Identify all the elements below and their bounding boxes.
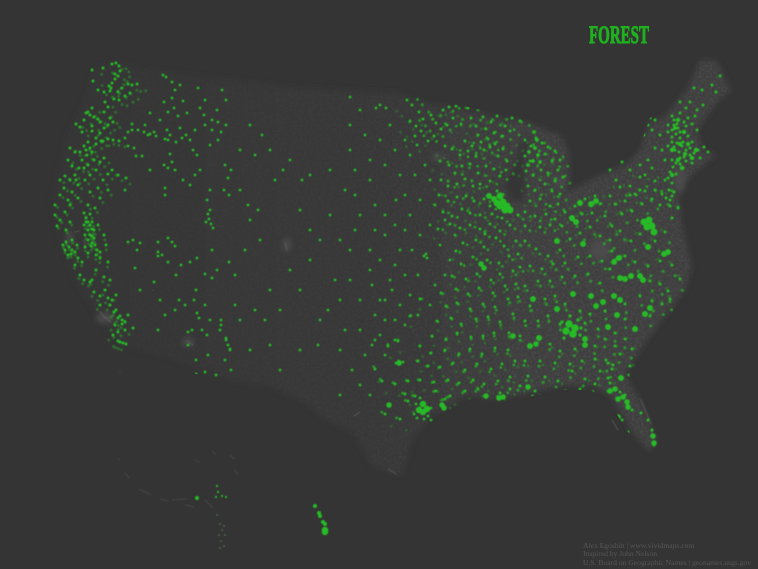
blobs: Appalachian and Carolina towns	[530, 201, 668, 378]
lakes: Michigan	[505, 132, 530, 203]
credit line 1: Alex Egoshin | www.vividmaps.com	[583, 541, 694, 550]
credit line 3: U.S. Board on Geographic Names | geonames.usgs.gov	[583, 558, 751, 567]
dots: Pacific Northwest	[55, 63, 137, 208]
dots: Florida	[604, 358, 656, 447]
dot: Anchorage	[195, 496, 199, 500]
blobs: Texas and Gulf towns	[389, 264, 536, 408]
dots: California	[55, 205, 133, 344]
dots: Hawaii	[315, 506, 325, 524]
dots: Michigan cluster	[528, 132, 540, 165]
dots: eastern field	[375, 100, 680, 419]
dots: Northern Rockies	[125, 75, 231, 228]
blob: Big Island	[322, 530, 328, 532]
blob: Houston spokes	[414, 398, 431, 420]
dots: Intermountain and Southwest	[128, 97, 386, 375]
dots: Michigan and Ohio Valley	[525, 138, 672, 227]
map: contiguous US land	[52, 60, 731, 476]
dots: Northeast	[600, 76, 720, 218]
map: settlement grain	[424, 62, 727, 442]
dots: Upper Midwest	[407, 100, 520, 231]
dots: Mississippi Valley	[375, 234, 520, 419]
blob: Maine and Boston clusters	[672, 120, 696, 175]
map: pale coast and city dots	[75, 231, 652, 474]
title: FOREST	[589, 22, 649, 49]
map: faint city lights	[67, 153, 685, 346]
blob: Chicago	[497, 196, 510, 210]
dots: Great Plains	[318, 125, 455, 395]
dots: western field, second scatter	[50, 66, 147, 350]
dots: Atlanta satellites	[562, 316, 581, 338]
map: Alaska grey coastline	[118, 443, 237, 508]
credit line 2: Inspired by John Nelson	[583, 549, 657, 558]
dots: Alaska	[216, 486, 226, 497]
blob: Houston	[419, 404, 427, 412]
dots: Alaska panhandle	[217, 515, 225, 548]
dots: Mid-Atlantic and Southeast	[520, 227, 680, 391]
blob: Chicago west	[489, 196, 494, 199]
blob: Washington DC area	[644, 220, 654, 232]
blob: Atlanta	[566, 324, 575, 334]
dots: eastern field, second scatter	[372, 98, 690, 430]
dots: eastern field, third scatter	[365, 97, 686, 432]
dots: western field	[55, 63, 137, 344]
map: forest place dots	[50, 63, 720, 548]
blobs: Florida towns	[610, 389, 654, 443]
credits	[583, 541, 751, 567]
